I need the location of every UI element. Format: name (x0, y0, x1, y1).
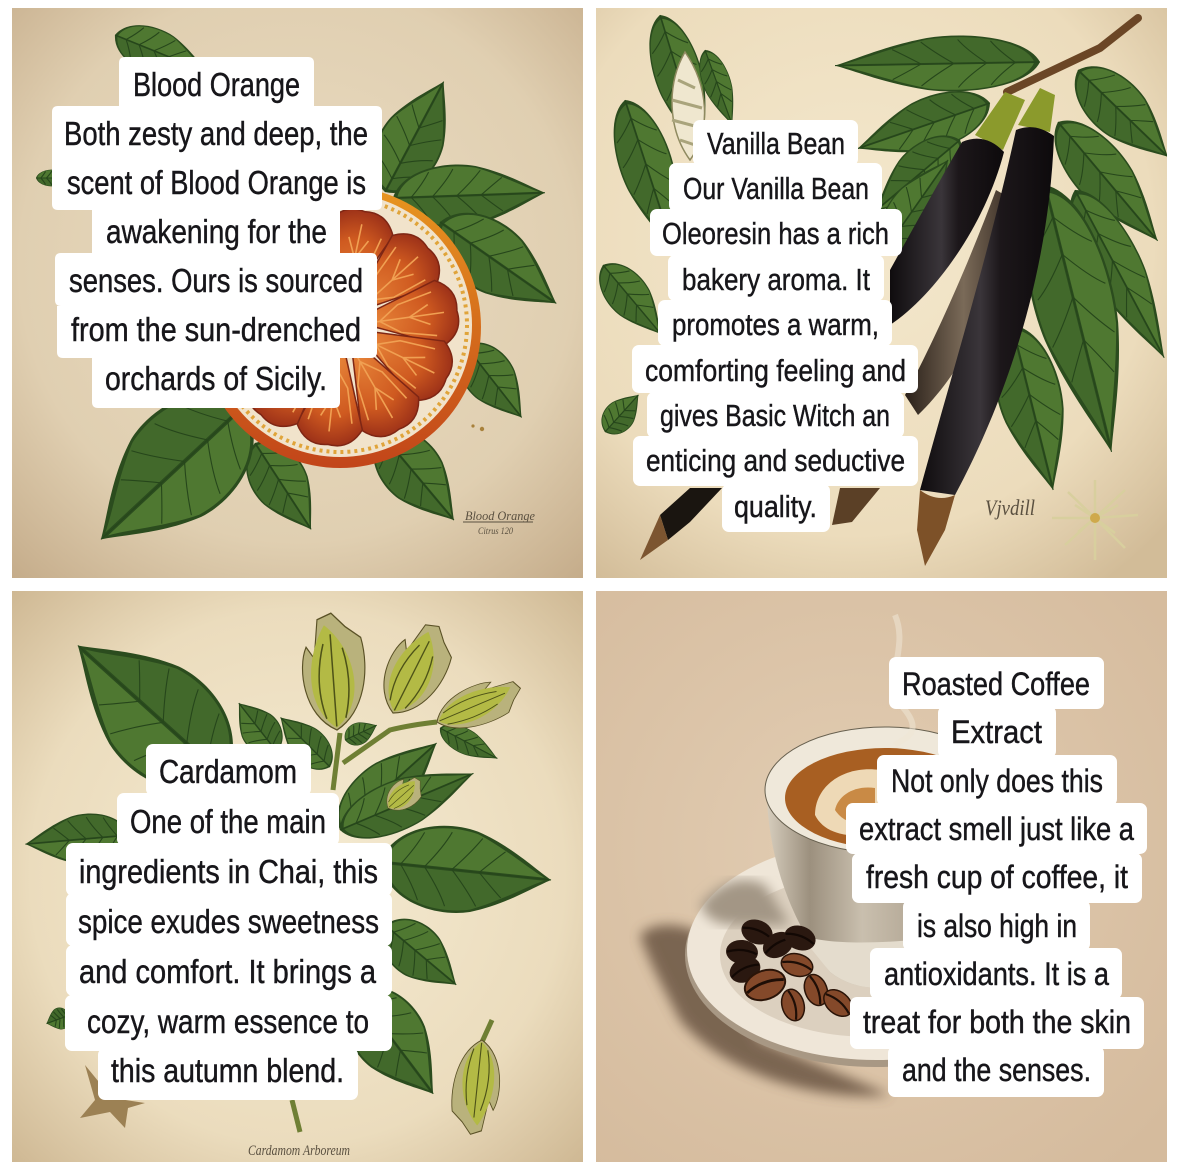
illustration: blood orange leaves (36, 25, 557, 540)
illustration: saucer shadow (640, 925, 890, 1096)
description lines: from the sun-drenched (71, 311, 361, 348)
description lines: promotes a warm, (672, 307, 879, 342)
description lines (859, 763, 1134, 1088)
illustration: cardamom pods (300, 612, 528, 1137)
heading: roasted coffee extract (902, 666, 1090, 750)
description lines (78, 803, 379, 1089)
illustration: vanilla stem (1007, 18, 1138, 92)
description lines: comforting feeling and (645, 353, 906, 388)
description lines: and the senses. (902, 1052, 1091, 1088)
description lines: and comfort. It brings a (79, 953, 377, 990)
illustration: coffee beans (726, 920, 851, 1022)
description lines: Not only does this (891, 763, 1103, 799)
text block: cardamom (65, 744, 392, 1100)
description lines: this autumn blend. (111, 1052, 344, 1089)
illustration: cardamom leaves (23, 604, 556, 1116)
description lines: senses. Ours is sourced (69, 262, 363, 299)
description lines: is also high in (917, 908, 1077, 944)
description lines: scent of Blood Orange is (67, 164, 366, 201)
description lines (645, 171, 906, 524)
description lines: spice exudes sweetness (78, 903, 379, 940)
illustration: dried flower (80, 1065, 145, 1128)
illustration: vanilla pods (640, 88, 1055, 566)
description lines: Oleoresin has a rich (662, 216, 889, 251)
illustration: vanilla flower bud (672, 52, 705, 160)
panel background (596, 591, 1167, 1162)
signature (463, 512, 535, 534)
heading: vanilla bean: Vanilla Bean (707, 126, 845, 161)
description lines (64, 115, 368, 397)
text block: roasted coffee extract (846, 657, 1147, 1097)
description lines: cozy, warm essence to (87, 1003, 369, 1040)
description lines: awakening for the (106, 213, 327, 250)
illustration: vanilla flower (1052, 480, 1138, 560)
illustration: cardamom stem (292, 722, 492, 1132)
description lines: treat for both the skin (863, 1004, 1131, 1040)
illustration: steam (895, 615, 913, 745)
heading: roasted coffee extract: Extract (951, 714, 1042, 750)
signature: Blood Orange (465, 508, 535, 523)
signature: Vjvdill (985, 495, 1035, 520)
text block: vanilla bean (632, 120, 918, 532)
description lines: ingredients in Chai, this (79, 853, 378, 890)
description lines: Our Vanilla Bean (683, 171, 869, 206)
heading: cardamom: Cardamom (159, 753, 297, 790)
description lines: One of the main (130, 803, 326, 840)
description lines: Both zesty and deep, the (64, 115, 368, 152)
orange seeds (471, 424, 484, 431)
panel: blood orange (12, 8, 583, 580)
panel: roasted coffee (596, 591, 1167, 1162)
description lines: orchards of Sicily. (105, 360, 327, 397)
illustration: saucer (685, 857, 890, 1067)
heading: roasted coffee extract: Roasted Coffee (902, 666, 1090, 702)
description lines: quality. (734, 489, 817, 524)
panel background (12, 8, 583, 578)
heading: blood orange: Blood Orange (133, 66, 300, 103)
description lines: extract smell just like a (859, 811, 1134, 847)
illustration: blood orange slice (224, 192, 481, 468)
signature: Citrus 120 (478, 526, 513, 536)
panel: vanilla bean (587, 8, 1179, 578)
description lines: antioxidants. It is a (884, 956, 1109, 992)
panel: cardamom (12, 591, 583, 1162)
text block: blood orange (52, 57, 382, 408)
description lines: bakery aroma. It (682, 262, 870, 297)
panel background (12, 591, 583, 1162)
illustration: vanilla leaves (587, 8, 1179, 498)
illustration: coffee cup (764, 726, 940, 988)
signature: Cardamom Arboreum (248, 1143, 350, 1159)
panel background (596, 8, 1167, 578)
description lines: gives Basic Witch an (660, 398, 890, 433)
description lines: fresh cup of coffee, it (866, 859, 1128, 895)
description lines: enticing and seductive (646, 443, 905, 478)
